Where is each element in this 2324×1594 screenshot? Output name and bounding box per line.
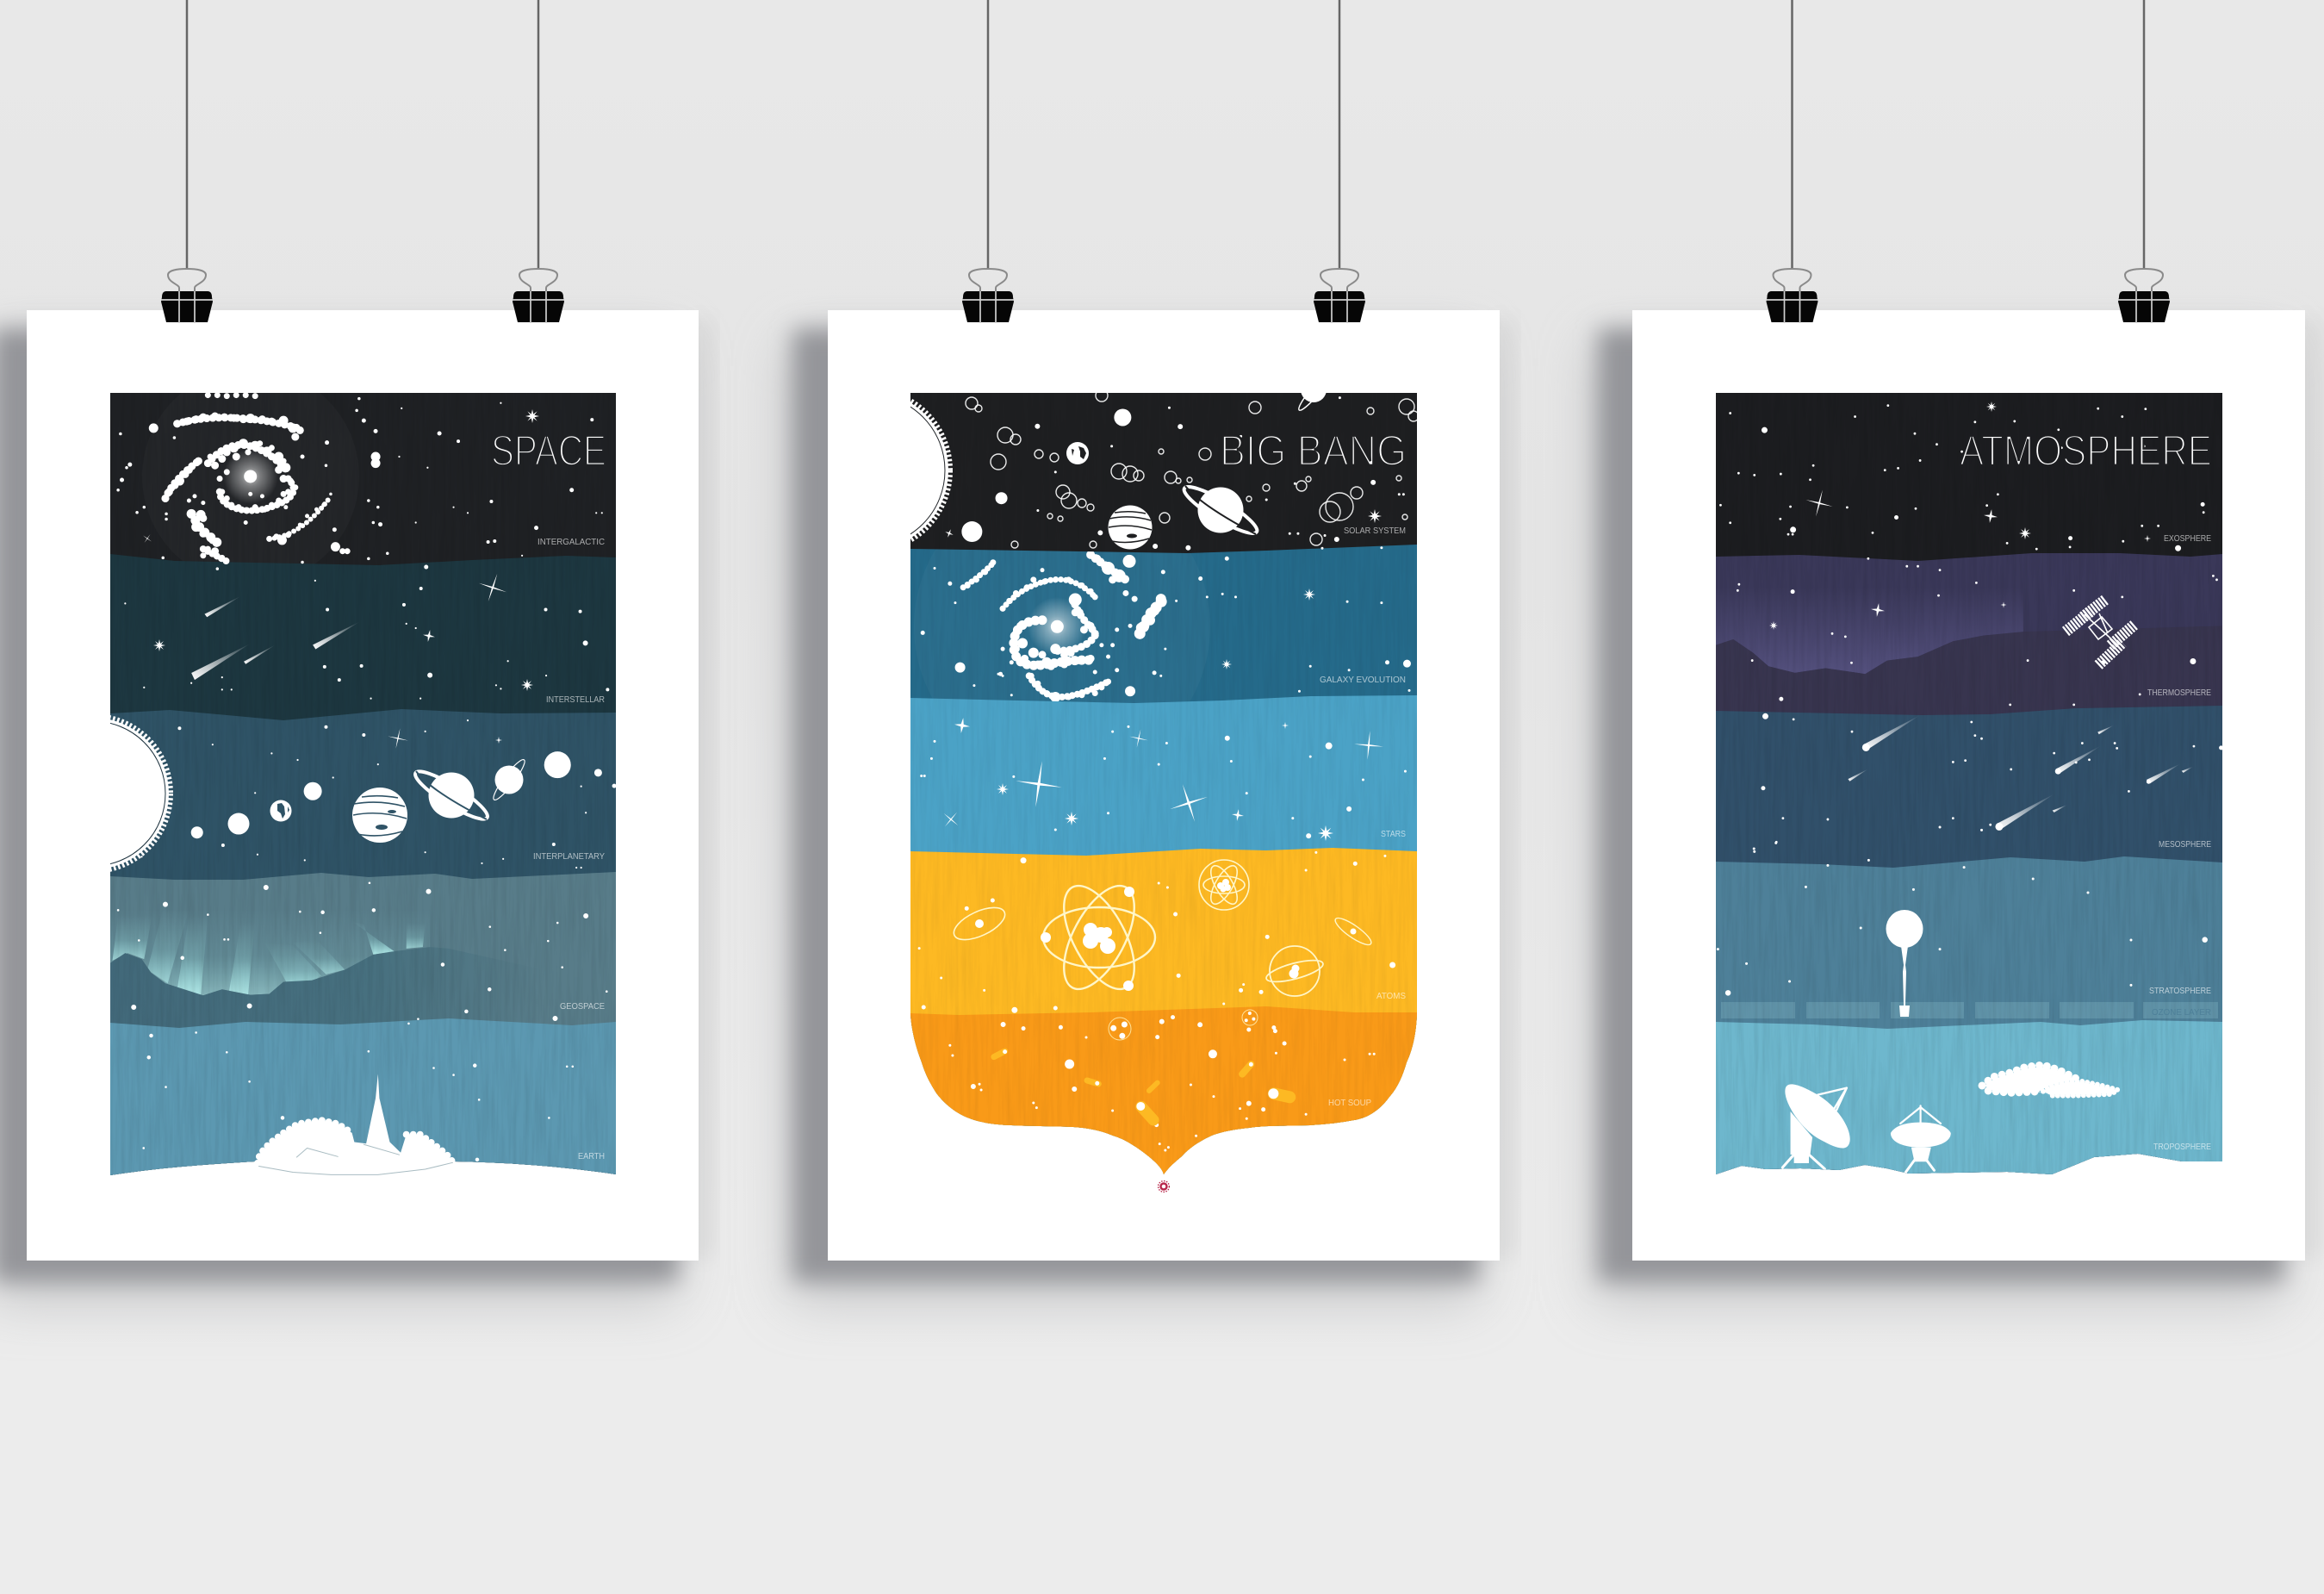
atom: large: [1041, 875, 1155, 999]
band: interplanetary: [110, 709, 616, 1206]
earth planet: [270, 800, 291, 822]
stars band dots: [922, 726, 1405, 836]
space station: [2066, 600, 2134, 665]
atom: lower right: [1265, 946, 1325, 996]
label: mesosphere: MESOSPHERE: [2159, 840, 2211, 850]
band: stratosphere: [1716, 856, 2222, 1206]
jupiter: [352, 788, 407, 843]
radio dish: small: [1891, 1105, 1951, 1173]
title: Big Bang: BIG BANG: [1220, 427, 1407, 475]
band: atoms: [910, 848, 1417, 1206]
label: interplanetary: INTERPLANETARY: [533, 852, 605, 862]
stars: [1769, 402, 2151, 630]
sky dots: [972, 398, 1403, 548]
capsules: [994, 1051, 1289, 1120]
poster: Atmosphere: [1632, 310, 2305, 1261]
label: thermosphere: THERMOSPHERE: [2147, 688, 2211, 698]
big bang artwork: [788, 373, 1419, 1206]
label: solar system: SOLAR SYSTEM: [1344, 526, 1406, 536]
stars: [938, 509, 1384, 841]
comets: [1848, 715, 2193, 829]
sun: [110, 715, 173, 872]
label: intergalactic: INTERGALACTIC: [538, 538, 605, 547]
label: atoms: ATOMS: [1376, 992, 1406, 1001]
saturn: [413, 769, 489, 821]
band: geospace: [110, 872, 616, 1206]
label: ozone layer: OZONE LAYER: [2152, 1008, 2211, 1018]
label: stratosphere: STRATOSPHERE: [2149, 987, 2211, 996]
atoms band and soup particles: [919, 852, 1393, 1150]
poster: Big Bang: [788, 310, 1500, 1261]
atom: upper right: [1199, 860, 1249, 910]
jupiter: [1108, 505, 1153, 550]
ozone layer segments: [1721, 1002, 2218, 1018]
band: stars: [910, 695, 1417, 1206]
sun: [788, 389, 950, 551]
poster shadows: [0, 319, 2322, 1301]
band: interstellar: [110, 554, 616, 1206]
interplanetary stars and dots: [125, 403, 614, 868]
radio dish: large: [1782, 1084, 1850, 1169]
band: troposphere: [1716, 1020, 2222, 1206]
label: stars: STARS: [1381, 830, 1406, 839]
band: mesosphere: [1716, 706, 2222, 1206]
space artwork: [110, 393, 616, 1175]
label: geospace: GEOSPACE: [560, 1002, 605, 1012]
title: Space: SPACE: [491, 427, 606, 475]
red singularity: [1159, 1181, 1169, 1192]
label: exosphere: EXOSPHERE: [2164, 534, 2211, 544]
bubbles: [966, 389, 1419, 548]
galaxy spiral: [923, 555, 1409, 697]
earth planet: [1066, 442, 1089, 464]
label: earth: EARTH: [578, 1152, 605, 1161]
binder clips and strings: [161, 0, 2170, 323]
aurora shadow ridge: [110, 947, 460, 1028]
galaxy spiral: [118, 395, 388, 569]
label: troposphere: TROPOSPHERE: [2153, 1143, 2211, 1152]
atom: left: [949, 901, 1010, 946]
title: Atmosphere: ATMOSPHERE: [1960, 427, 2212, 475]
ringed planet: [490, 757, 528, 803]
balloon: [1886, 910, 1923, 1017]
atom: right small: [1333, 914, 1374, 949]
rocket launch cloud: [258, 1074, 452, 1174]
band: intergalactic: [110, 393, 616, 1186]
label: galaxy evolution: GALAXY EVOLUTION: [1320, 676, 1406, 685]
soup dots: [973, 1022, 1249, 1104]
band: solar system: [910, 393, 1417, 1186]
saturn: [1179, 480, 1262, 540]
aurora glow: [1716, 588, 2222, 741]
soup atoms: [1109, 1010, 1258, 1040]
band: thermosphere: [1716, 553, 2222, 1206]
band: galaxy evolution: [910, 545, 1417, 1206]
band: hot soup: [910, 1006, 1417, 1206]
band: earth: [110, 1018, 616, 1175]
upper dots: [1720, 406, 2221, 842]
lower dots: [1718, 827, 2205, 993]
stars: [140, 409, 539, 750]
geospace and earth dots: [118, 883, 606, 1160]
label: interstellar: INTERSTELLAR: [546, 695, 605, 705]
poster: Space: [16, 310, 699, 1261]
clouds: [1982, 1065, 2118, 1096]
band: exosphere: [1716, 393, 2222, 1186]
comets: [191, 596, 360, 680]
label: hot soup: HOT SOUP: [1328, 1099, 1371, 1108]
atmosphere artwork: [1716, 393, 2222, 1206]
top ringed planet: [1296, 373, 1332, 413]
aurora: [110, 920, 430, 996]
